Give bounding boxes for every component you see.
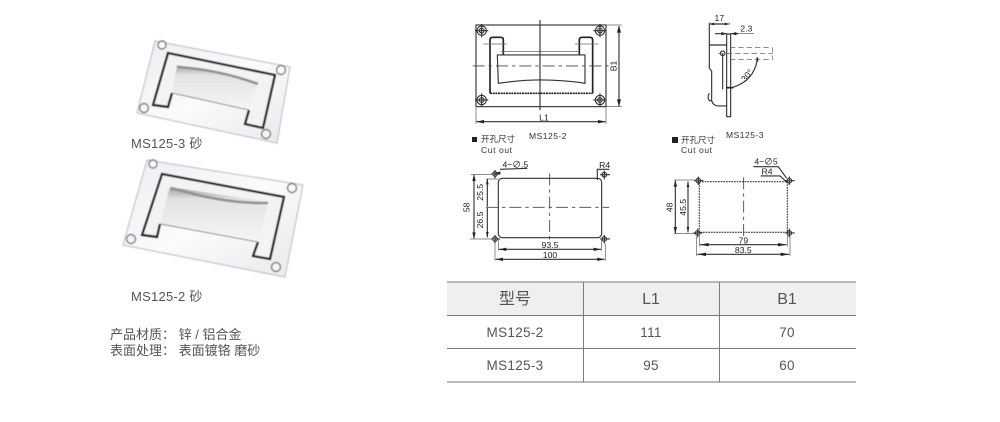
table header row: 型号 bbox=[499, 290, 531, 308]
drawing: MS125-3 cut out: R4 bbox=[761, 166, 773, 176]
drawing: MS125 side view: 17 bbox=[715, 13, 724, 23]
drawing: MS125-2 cut out: 100 bbox=[543, 250, 557, 260]
table row MS125-2: MS125-2 bbox=[487, 325, 543, 340]
cut out note left bbox=[472, 134, 516, 155]
photo: handle MS125-2 bbox=[123, 160, 303, 277]
table row MS125-3: 95 bbox=[643, 358, 659, 373]
drawing: MS125-2 cut out: 26.5 bbox=[475, 211, 485, 228]
cut out note left: Cut out bbox=[481, 145, 513, 155]
table row MS125-3 bbox=[487, 358, 795, 373]
table row MS125-3: MS125-3 bbox=[487, 358, 543, 373]
material and finish text: 表面处理： 表面镀铬 磨砂 bbox=[110, 343, 260, 358]
drawing: MS125-2 cut out: 4−∅.5 bbox=[502, 159, 528, 169]
drawing: MS125-2 cut out: 25.5 bbox=[475, 184, 485, 201]
table row MS125-2 bbox=[487, 325, 795, 340]
photo: handle MS125-3 bbox=[137, 41, 290, 143]
label: MS125-2: MS125-2 bbox=[529, 131, 567, 141]
drawing: MS125-3 cut out bbox=[665, 157, 795, 256]
drawing: MS125 side view: 2.3 bbox=[740, 23, 753, 33]
drawing: MS125-3 cut out: 48 bbox=[665, 202, 675, 212]
caption: MS125-3: MS125-3 砂 bbox=[131, 136, 203, 151]
drawing: MS125-3 cut out: 4−∅5 bbox=[754, 157, 778, 167]
drawing: MS125-3 cut out: 79 bbox=[739, 235, 748, 245]
table header row: B1 bbox=[777, 291, 797, 308]
table row MS125-2: 70 bbox=[779, 325, 795, 340]
drawing: MS125-3 cut out: 83.5 bbox=[735, 245, 752, 255]
table header background bbox=[447, 282, 856, 315]
drawing: MS125-2 front view: L1 bbox=[539, 113, 549, 123]
drawing: MS125-2 cut out: R4 bbox=[599, 160, 610, 170]
material and finish text bbox=[110, 327, 260, 358]
drawing: MS125-2 cut out: 93.5 bbox=[542, 240, 559, 250]
cut out note left: 开孔尺寸 bbox=[481, 134, 516, 144]
drawing: MS125-2 cut out bbox=[461, 159, 610, 261]
cut out note right: Cut out bbox=[681, 145, 713, 155]
table header row bbox=[499, 290, 797, 308]
caption: MS125-2: MS125-2 砂 bbox=[131, 289, 203, 304]
table row MS125-3: 60 bbox=[779, 358, 795, 373]
drawing: MS125 side view bbox=[708, 13, 773, 117]
cut out note right: 开孔尺寸 bbox=[681, 135, 716, 145]
label: MS125-3: MS125-3 bbox=[726, 130, 764, 140]
table: dimensions bbox=[447, 282, 856, 382]
material and finish text: 产品材质： 锌 / 铝合金 bbox=[110, 327, 241, 342]
drawing: MS125-2 front view: B1 bbox=[609, 61, 619, 71]
drawing: MS125 side view: 30° bbox=[739, 67, 755, 84]
table row MS125-2: 111 bbox=[640, 325, 662, 340]
cut out note right bbox=[672, 135, 716, 155]
table header row: L1 bbox=[642, 291, 660, 308]
drawing: MS125-2 cut out: 58 bbox=[461, 202, 471, 212]
drawing: MS125-3 cut out: 45.5 bbox=[678, 199, 688, 216]
drawing: MS125-2 front view bbox=[473, 20, 622, 124]
